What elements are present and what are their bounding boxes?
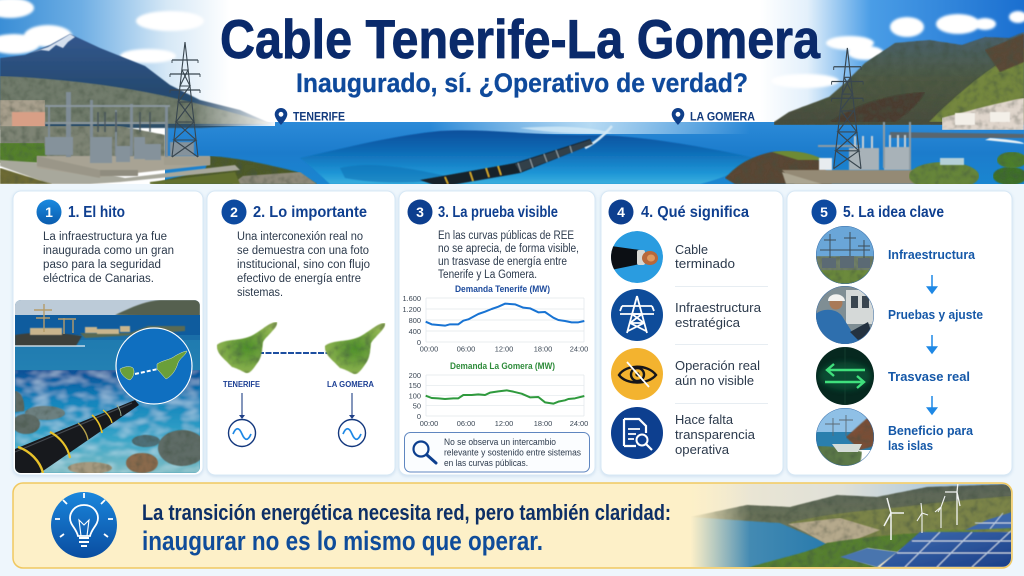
label: Infraestructura: Infraestructura [888, 247, 976, 262]
callout: no exchange [404, 432, 590, 472]
heading 1: 1. El hito [68, 204, 125, 221]
photo: technician [816, 286, 874, 344]
chart: Demanda La Gomera: 150 [409, 381, 421, 390]
bottom banner [13, 482, 1012, 568]
panel: 5. La idea clave [787, 191, 1012, 475]
arrow and system right [338, 393, 366, 446]
header illustration [0, 0, 1024, 190]
arrow 3 [928, 396, 936, 414]
chart: Demanda La Gomera: 50 [413, 402, 421, 410]
chart: Demanda Tenerife: 1.200 [402, 305, 421, 314]
icon: pylon [611, 289, 663, 341]
text 1: La infraestructura ya fue [43, 231, 167, 243]
text 1: paso para la seguridad [43, 259, 161, 271]
chart: Demanda La Gomera: Demanda La Gomera (MW) [450, 361, 555, 372]
island left [217, 322, 277, 373]
left foreground land [0, 126, 317, 184]
badge 2: 2 [230, 204, 238, 220]
location: La Gomera [672, 108, 755, 125]
chart: Demanda Tenerife: 00:00 [420, 344, 438, 354]
cable in header [420, 126, 612, 187]
heading 2: 2. Lo importante [253, 204, 367, 221]
icon: crossed eye [611, 348, 663, 400]
text 3: no se aprecia, de forma visible, [438, 243, 579, 255]
chart: Demanda Tenerife: 0 [417, 338, 421, 347]
icon: cable section [611, 231, 663, 283]
banner text [142, 500, 671, 556]
label: Trasvase real: Trasvase real [888, 369, 970, 384]
arrow and system left [228, 393, 256, 446]
location: La Gomera: LA GOMERA [690, 112, 755, 124]
heading 5: 5. La idea clave [843, 204, 944, 221]
chart: Demanda La Gomera: 00:00 [420, 419, 438, 428]
clouds [0, 0, 1024, 88]
arrow 2 [928, 335, 936, 353]
photo: substation [816, 226, 874, 286]
text 2: efectivo de energía entre [237, 273, 361, 285]
badge 5 [812, 200, 836, 224]
location: Tenerife: TENERIFE [293, 112, 345, 124]
badge 1 [36, 200, 62, 224]
row text: Operación real: aún no visible [675, 374, 754, 388]
chart: Demanda La Gomera [409, 361, 588, 428]
callout: no exchange: relevante y sostenido entre sistemas [444, 448, 581, 458]
island right [325, 323, 385, 374]
badge 3 [408, 200, 432, 224]
chart: Demanda Tenerife: 800 [409, 316, 421, 325]
chart: Demanda La Gomera: 200 [409, 371, 421, 380]
photo: islands benefit [816, 408, 874, 466]
label: Beneficio: Beneficio para [888, 423, 974, 438]
badge 5: 5 [820, 204, 828, 220]
chart: Demanda La Gomera: 0 [417, 412, 421, 421]
text 1: eléctrica de Canarias. [43, 273, 154, 285]
left substation [37, 92, 210, 178]
left pylon [170, 42, 200, 157]
row text: Cable terminado: terminado [675, 257, 735, 271]
text 2: institucional, sino con flujo [237, 259, 370, 271]
banner photo [694, 484, 1011, 567]
interconnection line [258, 352, 334, 354]
label: Pruebas y ajuste: Pruebas y ajuste [888, 307, 983, 322]
chart: Demanda La Gomera: 12:00 [495, 419, 513, 428]
row text: Hace falta transparencia: transparencia [675, 428, 755, 442]
Teide mountain [0, 34, 275, 130]
row text: Infraestructura estratégica [675, 301, 761, 330]
chart: Demanda La Gomera: 06:00 [457, 419, 475, 428]
banner text: inaugurar no es lo mismo que operar. [142, 526, 543, 556]
badge 4: 4 [617, 204, 625, 220]
text 2 [237, 231, 370, 299]
callout: no exchange: en las curvas públicas. [444, 458, 528, 468]
chart: Demanda Tenerife: 1.600 [402, 294, 421, 303]
heading 4: 4. Qué significa [641, 204, 749, 221]
La Gomera mountains [774, 32, 1024, 144]
panel: 4. Qué significa [601, 191, 783, 475]
heading 3: 3. La prueba visible [438, 204, 558, 221]
photo: green arrows [816, 347, 874, 405]
text 2: Una interconexión real no [237, 231, 363, 243]
row text: Hace falta transparencia: operativa [675, 443, 729, 457]
text 2: sistemas. [237, 287, 283, 299]
row text: Hace falta transparencia [675, 413, 755, 457]
badge 1: 1 [45, 204, 53, 220]
banner text: La transición energética necesita red, pero también claridad: [142, 500, 671, 525]
row text: Infraestructura estratégica: estratégica [675, 316, 740, 330]
inset map [116, 328, 192, 404]
icon: magnifier [414, 442, 436, 463]
panel: 3. La prueba visible [399, 191, 595, 475]
label La Gomera: LA GOMERA [327, 379, 374, 389]
photo: submarine cable [12, 300, 206, 474]
icon: document search [611, 407, 663, 459]
row text: Operación real: Operación real [675, 359, 760, 373]
sea strip [165, 122, 1024, 184]
chart: Demanda Tenerife: 18:00 [534, 344, 552, 354]
panel: 1. El hito [12, 191, 206, 475]
right foreground [725, 122, 1024, 190]
callout: no exchange: No se observa un intercambio [444, 437, 556, 447]
panel: 2. Lo importante [207, 191, 395, 475]
text 2: se demuestra con una foto [237, 245, 369, 257]
chart: Demanda Tenerife: Demanda Tenerife (MW) [455, 284, 550, 295]
label: Beneficio [888, 423, 974, 453]
text 1 [43, 231, 174, 285]
chart: Demanda La Gomera: 24:00 [570, 419, 588, 428]
right pylon [832, 48, 863, 169]
chart: Demanda Tenerife [402, 284, 588, 354]
title: Cable Tenerife-La Gomera [220, 8, 820, 70]
chart: Demanda La Gomera: 100 [409, 392, 421, 400]
icon: light bulb [51, 492, 117, 558]
location: Tenerife [275, 108, 345, 125]
row text: Cable terminado: Cable [675, 243, 708, 257]
text 3: Tenerife y La Gomera. [438, 269, 537, 281]
text 3: un trasvase de energía entre [438, 256, 567, 268]
text 3: En las curvas públicas de REE [438, 230, 574, 242]
subtitle: Inaugurado, sí. ¿Operativo de verdad? [296, 68, 748, 98]
chart: Demanda Tenerife: 12:00 [495, 344, 513, 354]
label: Beneficio: las islas [888, 438, 933, 453]
row text: Hace falta transparencia: Hace falta [675, 413, 733, 427]
chart: Demanda La Gomera: 18:00 [534, 419, 552, 428]
chart: Demanda Tenerife: 24:00 [570, 344, 588, 354]
text 3 [438, 230, 579, 281]
arrow 1 [928, 275, 936, 293]
badge 3: 3 [416, 204, 424, 220]
badge 4 [608, 200, 634, 224]
badge 2 [222, 200, 246, 224]
chart: Demanda Tenerife: 06:00 [457, 344, 475, 354]
label Tenerife: TENERIFE [223, 379, 260, 389]
row text: Cable terminado [675, 243, 735, 271]
row text: Operación real [675, 359, 760, 388]
chart: Demanda Tenerife: 400 [409, 327, 421, 336]
text 1: inaugurada como un gran [43, 245, 174, 257]
row text: Infraestructura estratégica: Infraestructura [675, 301, 761, 315]
